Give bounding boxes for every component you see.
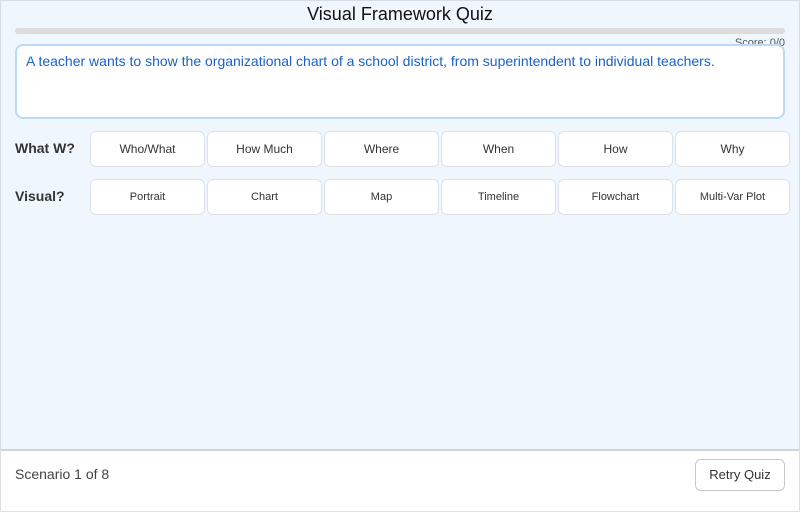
row: visual options: [90, 179, 790, 215]
row: W options: Why: [720, 142, 744, 156]
button: retry quiz: [695, 459, 785, 491]
row: W options: When: [483, 142, 514, 156]
row: W options: How: [603, 142, 628, 156]
row: W options: [90, 131, 790, 167]
button: retry quiz: Retry Quiz: [709, 467, 771, 482]
row: visual options: Chart: [251, 191, 278, 203]
label: What W?: What W?: [15, 140, 75, 156]
title: Visual Framework Quiz: [307, 4, 493, 24]
progress bar: [15, 28, 785, 34]
score: Score: 0/0: [735, 37, 785, 49]
row: visual options: Timeline: [478, 191, 519, 203]
row: visual options: Multi-Var Plot: [700, 191, 765, 203]
row: visual options: Flowchart: [592, 191, 639, 203]
row: visual options: Map: [371, 191, 392, 203]
row: visual options: Portrait: [130, 191, 165, 203]
footer: scenario counter: Scenario 1 of 8: [15, 466, 109, 482]
row: W options: How Much: [236, 142, 293, 156]
row: W options: Who/What: [119, 142, 176, 156]
question box: A teacher wants to show the organizational chart of a school district, from superintendent to individual teachers.: [26, 53, 715, 69]
row: W options: Where: [364, 142, 399, 156]
question box: [15, 44, 785, 119]
label: Visual?: Visual?: [15, 188, 65, 204]
